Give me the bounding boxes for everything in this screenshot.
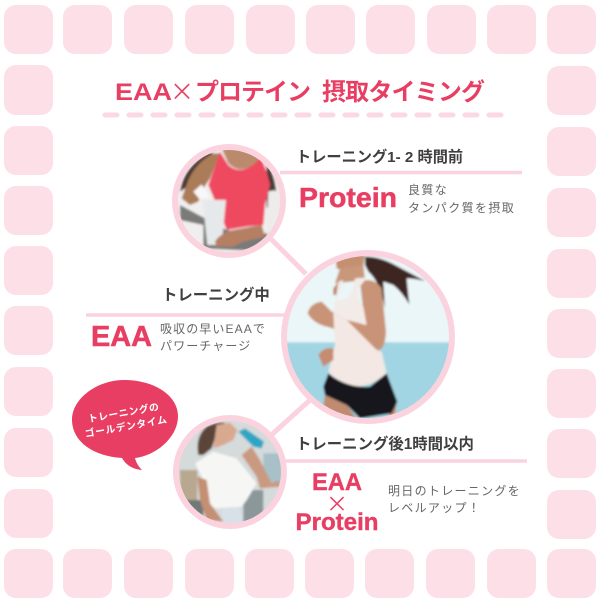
photo: woman running on the beach xyxy=(280,245,460,429)
title dashed underline xyxy=(105,112,504,118)
heading: before training: トレーニング1- 2 時間前 xyxy=(296,148,463,166)
label: EAA × Protein: Protein xyxy=(296,509,378,536)
label: EAA: EAA xyxy=(91,321,152,353)
photo: woman mixing protein shake xyxy=(170,142,290,258)
label: Protein: Protein xyxy=(299,182,397,213)
description: protein: タンパク質を摂取 xyxy=(408,200,515,215)
description: protein: 良質な xyxy=(408,182,448,197)
label: EAA × Protein xyxy=(296,469,378,536)
photo: woman drinking from bottle xyxy=(173,415,290,530)
speech bubble: トレーニングの xyxy=(87,400,160,425)
description: after training: 明日のトレーニングを xyxy=(388,484,521,498)
title: EAA xyxy=(115,79,172,106)
speech bubble xyxy=(72,380,178,470)
title: 摂取タイミング xyxy=(322,78,485,106)
title: × xyxy=(170,72,194,107)
label: EAA × Protein: EAA xyxy=(312,469,362,496)
label: EAA × Protein: × xyxy=(326,487,348,519)
heading: after training: トレーニング後1時間以内 xyxy=(296,434,474,453)
title xyxy=(115,72,485,107)
heading: during training: トレーニング中 xyxy=(162,285,270,304)
connector lines xyxy=(86,172,527,461)
title: プロテイン xyxy=(195,79,311,106)
description: EAA: 吸収の早いEAAで xyxy=(160,322,266,336)
speech bubble: ゴールデンタイム xyxy=(84,413,169,440)
description: EAA: パワーチャージ xyxy=(160,339,251,353)
description: after training: レベルアップ！ xyxy=(388,501,481,515)
